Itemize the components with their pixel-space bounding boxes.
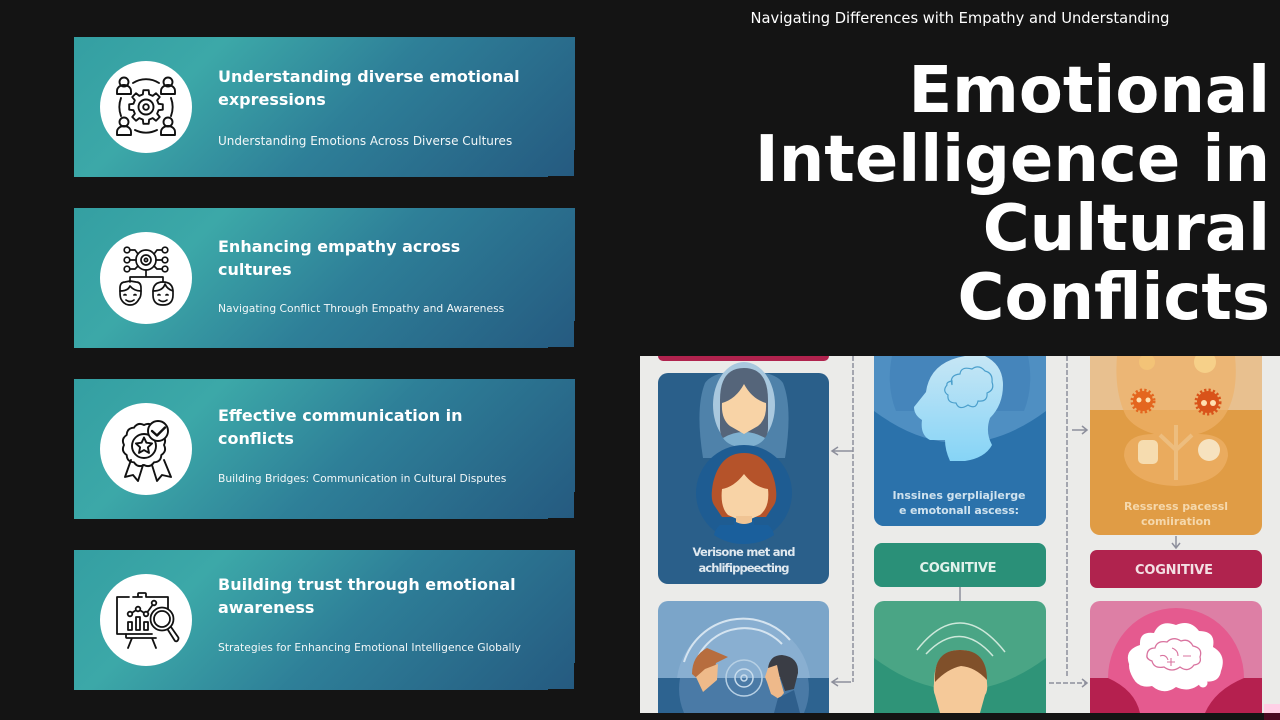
text: card 4 description: Strategies for Enhancing Emotional Intelligence Globally — [218, 641, 521, 654]
heading: card 4: Building trust through emotional — [218, 575, 516, 594]
heading: card 3 — [218, 409, 462, 444]
corner tint — [1264, 704, 1280, 713]
icon: award rosette with check mark — [100, 403, 192, 495]
icon: network above two faces — [100, 232, 192, 324]
caption: left panel second line: achlifippeecting — [698, 561, 790, 575]
top red bar fragment — [658, 356, 829, 361]
icon: people around a gear — [100, 61, 192, 153]
panel: card 4 building trust through emotional awareness — [74, 550, 575, 690]
panel: head with brain — [874, 356, 1046, 526]
title: Intelligence in — [755, 123, 1270, 197]
label: green cognitive: COGNITIVE — [920, 561, 996, 576]
heading: card 1 — [218, 70, 518, 108]
panel: pink thought cloud — [1090, 601, 1262, 713]
panel: card 1 understanding diverse emotional expressions — [74, 37, 575, 177]
label: green cognitive — [874, 543, 1046, 587]
caption: orange panel second line: comiiration — [1141, 515, 1211, 528]
panel: green face — [874, 601, 1046, 713]
subtitle: Navigating Differences with Empathy and Understanding — [751, 10, 1169, 27]
caption: orange panel: Ressress pacessl — [1124, 500, 1228, 513]
heading: card 4 — [218, 578, 514, 613]
title: Conflicts — [958, 261, 1270, 335]
panel: card 3 effective communication in conflicts — [74, 379, 575, 519]
title — [755, 54, 1270, 335]
icon: presentation board with magnifier — [100, 574, 192, 666]
heading: card 2: cultures — [218, 260, 292, 279]
caption: middle panel second line: e emotonall ascess: — [899, 504, 1019, 517]
caption: middle panel: Inssines gerpliajlerge — [892, 489, 1026, 502]
heading: card 2 — [218, 240, 460, 275]
heading: card 1: Understanding diverse emotional — [218, 67, 520, 86]
text: card 1 description: Understanding Emotions Across Diverse Cultures — [218, 134, 512, 148]
heading: card 3: Effective communication in — [218, 406, 463, 425]
small corner mark — [1264, 713, 1280, 720]
illustration: emotional and cognitive process chart — [640, 356, 1280, 713]
heading: card 2: Enhancing empathy across — [218, 237, 460, 256]
heading: card 4: awareness — [218, 598, 314, 617]
panel: two women portraits — [658, 362, 829, 584]
caption: left panel: Verisone met and — [692, 545, 796, 559]
text: card 3 description: Building Bridges: Communication in Cultural Disputes — [218, 472, 506, 485]
text: card 2 description: Navigating Conflict Through Empathy and Awareness — [218, 302, 504, 315]
heading: card 1: expressions — [218, 90, 326, 109]
dashed connector lines and arrows — [832, 356, 1180, 687]
label: red cognitive — [1090, 550, 1262, 588]
panel: two faces with spiral — [658, 601, 829, 713]
heading: card 3: conflicts — [218, 429, 294, 448]
panel: orange emotions tree — [1090, 351, 1262, 535]
panel: card 2 enhancing empathy across cultures — [74, 208, 575, 348]
title: Cultural — [983, 192, 1270, 266]
label: red cognitive: COGNITIVE — [1135, 563, 1213, 578]
title: Emotional — [908, 54, 1270, 128]
